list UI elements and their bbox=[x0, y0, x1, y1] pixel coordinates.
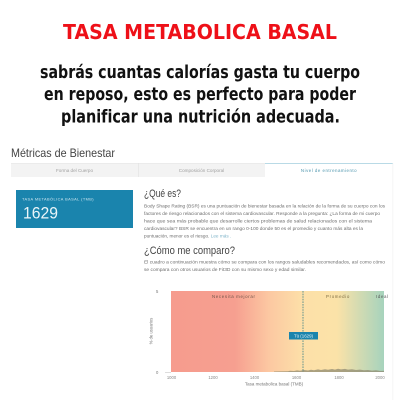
title: TASA METABOLICA BASAL bbox=[63, 20, 337, 44]
subtitle text block: planificar una nutrición adecuada. bbox=[61, 108, 340, 128]
x axis labels: 1000 bbox=[167, 375, 177, 380]
x axis labels: 1400 bbox=[250, 375, 260, 380]
subtitle text block bbox=[40, 63, 360, 128]
section: ¿Cómo me comparo?: se compara con otros usuarios de Fit3D con su mismo sexo y edad similar. bbox=[144, 267, 306, 272]
section: ¿Qué es?: hace que sea más probable que desarrolle ciertos problemas de salud relacionados con el sistema bbox=[144, 218, 372, 223]
section: ¿Qué es?: ¿Qué es? bbox=[144, 188, 181, 200]
section: ¿Cómo me comparo? bbox=[144, 245, 385, 272]
section: ¿Cómo me comparo?: El cuadro a continuación muestra cómo se compara con los rangos saludables recomendados, así como cómo bbox=[144, 260, 385, 265]
section: ¿Qué es?: cardiovascular? BSR se encuentra en un rango 0-100 donde 50 es el promedio y cuanto más alta es la bbox=[144, 226, 363, 231]
tab bar: Composición Corporal bbox=[179, 168, 224, 173]
y axis: % de usuarios bbox=[148, 318, 154, 344]
card: tasa metabólica basal bbox=[16, 190, 133, 228]
x axis labels: 2000 bbox=[375, 375, 385, 380]
tooltip: Tú (1629): Tú (1629) bbox=[294, 334, 314, 339]
tab bar: Nivel de entrenamiento bbox=[301, 168, 357, 173]
section: ¿Qué es?: factores de riesgo relacionados con el sistema cardiovascular. Responde a la pregunta: ¿La forma de mi cuerpo bbox=[144, 211, 380, 216]
section: ¿Qué es?: puntuación, menor es el riesgo. Lee más . bbox=[144, 233, 231, 238]
tab bar bbox=[11, 163, 393, 177]
histogram of users bbox=[274, 369, 384, 372]
tab bar: Forma del Cuerpo bbox=[56, 168, 93, 173]
x axis labels: 1600 bbox=[292, 375, 302, 380]
y axis: 5 bbox=[156, 289, 159, 294]
zone labels: Necesita mejorar bbox=[212, 294, 256, 299]
y axis bbox=[148, 289, 171, 375]
panel: metrics dashboard bbox=[11, 163, 393, 400]
section: ¿Qué es?: Body Shape Rating (BSR) es una puntuación de bienestar basada en la relación de la forma de su cuerpo con los bbox=[144, 203, 386, 208]
card: tasa metabólica basal: 1629 bbox=[23, 204, 58, 222]
section: ¿Cómo me comparo?: ¿Cómo me comparo? bbox=[144, 245, 235, 257]
zone labels: Promedio bbox=[326, 294, 350, 299]
chart zones gradient bbox=[171, 291, 384, 372]
x axis labels bbox=[167, 375, 385, 380]
x axis labels: 1800 bbox=[334, 375, 344, 380]
x axis title: Tasa metabolica basal (TMB) bbox=[245, 382, 304, 386]
zone labels bbox=[212, 294, 389, 299]
section: ¿Qué es? bbox=[144, 188, 386, 238]
marker line bbox=[302, 291, 304, 372]
heading: Métricas de Bienestar: Métricas de Bienestar bbox=[11, 146, 115, 160]
y axis: 0 bbox=[156, 370, 159, 375]
tooltip: Tú (1629) bbox=[289, 332, 318, 340]
card: tasa metabólica basal: TASA METABÓLICA BASAL (TMB) bbox=[22, 196, 94, 202]
zone labels: Ideal bbox=[376, 294, 389, 299]
chart: distribution of users by basal metabolic rate bbox=[148, 289, 389, 386]
x axis labels: 1200 bbox=[208, 375, 218, 380]
